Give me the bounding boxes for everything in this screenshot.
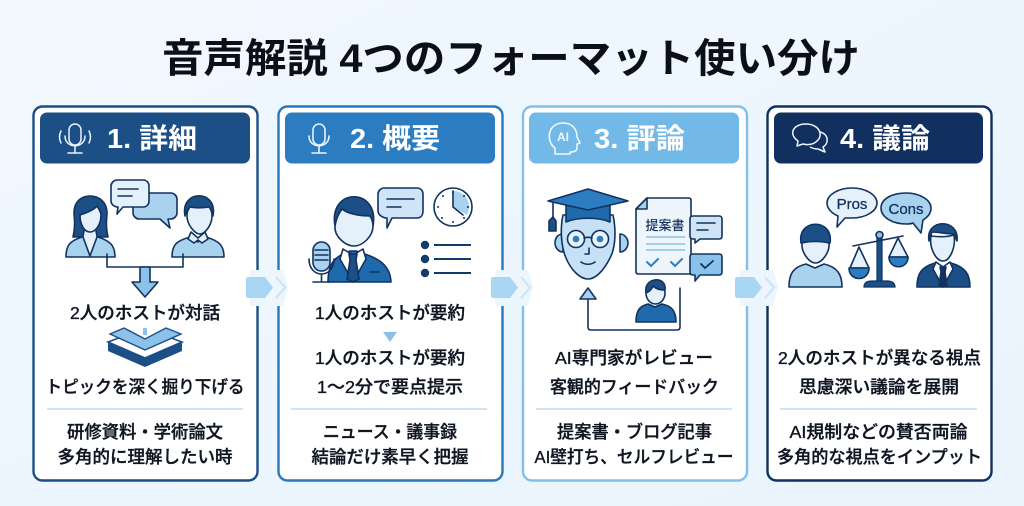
speech bubble: Pros: Pros xyxy=(837,196,867,213)
text: host summary: 1人のホストが要約 xyxy=(315,303,465,323)
text: use cases: 多角的に理解したい時 xyxy=(58,447,232,467)
header: 3. review xyxy=(529,112,739,164)
icon: AI head xyxy=(549,123,580,154)
icon: microphone xyxy=(309,124,329,153)
arrow: down triangle xyxy=(383,332,397,342)
icon: layered dig-down stack xyxy=(108,328,182,367)
text: AI expert description xyxy=(550,348,719,397)
panel: 3. review xyxy=(523,106,747,480)
header: 4. debate: 4. 議論 xyxy=(840,123,930,154)
text: debate description: 2人のホストが異なる視点 xyxy=(778,348,981,368)
speech bubble: Cons xyxy=(881,193,931,233)
panel: 4. debate xyxy=(768,106,992,480)
text: use cases xyxy=(777,422,982,467)
text: summary description: 1人のホストが要約 xyxy=(315,348,465,368)
text: use cases xyxy=(312,422,468,467)
illustration: AI expert reviews proposal xyxy=(548,189,722,330)
speech bubble: Pros xyxy=(827,188,877,227)
text: use cases: 結論だけ素早く把握 xyxy=(312,447,468,467)
text: use cases xyxy=(58,422,232,467)
icon: microphone with sound waves xyxy=(60,124,90,153)
text: use cases: AI規制などの賛否両論 xyxy=(790,422,968,442)
header: 4. debate xyxy=(774,112,983,164)
illustration: AI expert reviews proposal: 提案書 xyxy=(645,218,685,233)
header: 2. overview: 2. 概要 xyxy=(350,123,440,154)
arrow: panel 1 to 2 xyxy=(246,270,288,306)
text: use cases: 研修資料・学術論文 xyxy=(67,422,223,442)
text: use cases xyxy=(534,422,734,467)
text: summary description: 1〜2分で要点提示 xyxy=(317,377,463,397)
text: AI expert description: 客観的フィードバック xyxy=(550,377,719,397)
text: debate description xyxy=(778,348,981,397)
header: 1. detail: 1. 詳細 xyxy=(107,123,197,154)
text: use cases: AI壁打ち、セルフレビュー xyxy=(534,447,734,467)
panel: 1. detail xyxy=(34,106,258,480)
header: 3. review: 3. 評論 xyxy=(594,123,685,154)
illustration: two hosts in dialogue xyxy=(66,180,224,297)
arrow: panel 2 to 3 xyxy=(491,270,533,306)
title: 音声解説 4つのフォーマット使い分け xyxy=(162,37,860,81)
illustration: single host with summary xyxy=(309,188,472,282)
speech bubble: Cons: Cons xyxy=(888,201,924,218)
text: two hosts talk: 2人のホストが対話 xyxy=(70,303,220,323)
text: use cases: 多角的な視点をインプット xyxy=(777,447,982,467)
text: summary description xyxy=(315,348,465,397)
text: dig deep into topic: トピックを深く掘り下げる xyxy=(46,377,244,397)
header: 1. detail xyxy=(40,112,250,164)
header: 2. overview xyxy=(285,112,495,164)
text: debate description: 思慮深い議論を展開 xyxy=(799,377,959,397)
illustration: pros and cons debate xyxy=(789,188,970,287)
icon: AI head: AI xyxy=(557,130,569,144)
icon: two speech bubbles xyxy=(793,124,827,152)
text: use cases: ニュース・議事録 xyxy=(323,422,457,442)
arrow: panel 3 to 4 xyxy=(735,270,778,306)
text: use cases: 提案書・ブログ記事 xyxy=(557,422,712,442)
panel: 2. overview xyxy=(278,106,502,480)
text: AI expert description: AI専門家がレビュー xyxy=(555,348,713,368)
